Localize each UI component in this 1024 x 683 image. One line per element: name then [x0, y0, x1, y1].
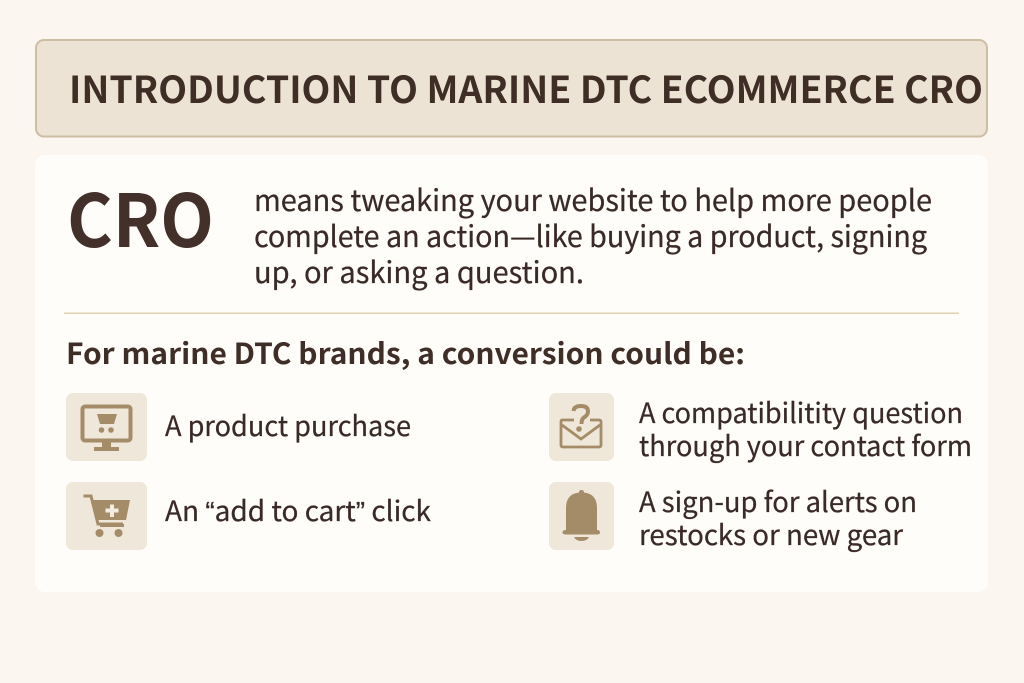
conversion subheading: For marine DTC brands, a conversion could be: — [66, 331, 745, 373]
item: product purchase — [66, 393, 411, 461]
icon: cart with plus — [66, 482, 147, 550]
label: A compatibilitity question — [639, 392, 963, 432]
title banner — [36, 40, 987, 136]
label: An “add to cart” click — [165, 490, 432, 530]
item: compatibility question — [549, 392, 972, 465]
definition text: complete an action—like buying a product, signing — [254, 214, 927, 256]
label: A product purchase — [165, 405, 411, 445]
title: INTRODUCTION TO MARINE DTC ECOMMERCE CRO — [69, 60, 983, 114]
item: add to cart — [66, 482, 432, 550]
definition text — [254, 178, 932, 292]
label — [639, 481, 917, 554]
icon: envelope with question mark — [549, 393, 614, 461]
label: through your contact form — [639, 425, 972, 465]
label: restocks or new gear — [639, 514, 903, 554]
icon: monitor with cart — [66, 393, 147, 461]
divider — [64, 312, 959, 314]
CRO heading: CRO — [67, 163, 214, 269]
definition text: up, or asking a question. — [254, 250, 584, 292]
label: A sign-up for alerts on — [639, 481, 917, 521]
panel: definition and conversions — [35, 155, 988, 592]
item: alert sign-up — [549, 481, 917, 554]
label — [639, 392, 972, 465]
definition text: means tweaking your website to help more people — [254, 178, 932, 220]
icon: bell — [549, 482, 614, 550]
